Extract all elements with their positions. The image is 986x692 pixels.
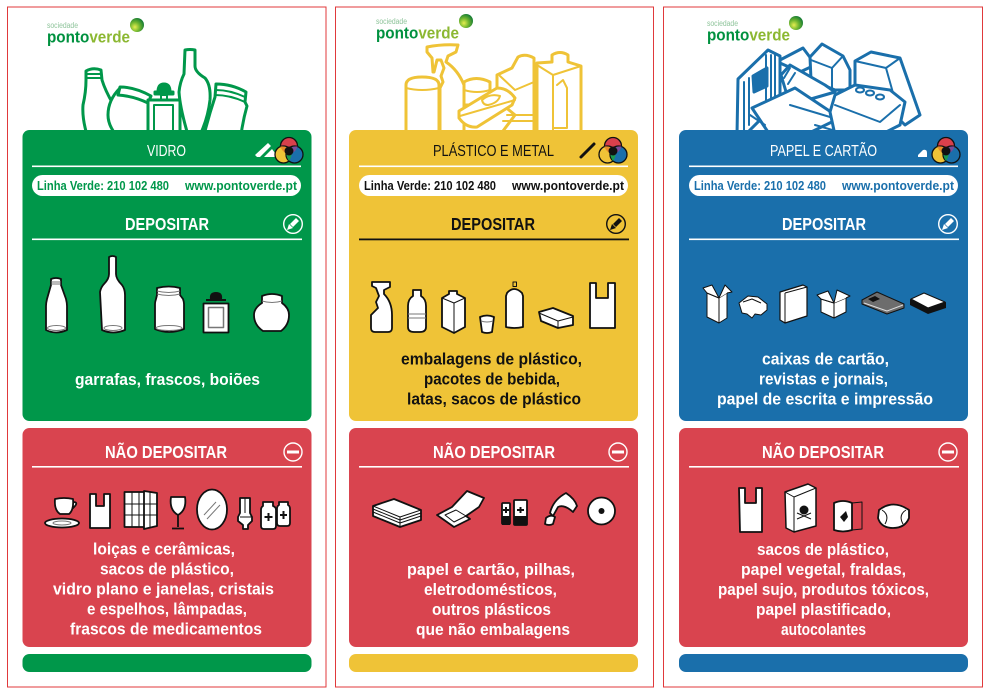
icon: window	[124, 491, 157, 529]
logo: ponto verde: pontoverde	[707, 26, 790, 44]
text: rejected list: vidro plano e janelas, cristais	[53, 580, 274, 598]
text: rejected list: eletrodomésticos,	[424, 581, 557, 599]
card: nao depositar plastico	[349, 428, 638, 647]
text: rejected list	[53, 540, 274, 638]
icon: toxic box	[785, 484, 816, 532]
icon: small cup	[480, 316, 494, 333]
heading: nao depositar: NÃO DEPOSITAR	[105, 441, 227, 462]
bottom colour bar	[679, 654, 968, 672]
icon: plastic bottle	[408, 290, 426, 332]
icons: accepted plastic and metal	[371, 282, 615, 333]
icons: accepted paper	[703, 285, 946, 323]
contact pill: Linha Verde: 210 102 480	[37, 178, 169, 193]
text: rejected list: frascos de medicamentos	[70, 620, 262, 638]
logo: ponto verde	[376, 14, 473, 42]
contact pill	[689, 175, 958, 196]
icon: wine bottle	[100, 256, 125, 332]
icon: jar	[155, 286, 184, 332]
panel: vidro	[8, 7, 326, 687]
text: accepted list: caixas de cartão,	[762, 350, 889, 368]
logo: ponto verde: pontoverde	[376, 24, 459, 42]
logo: ponto verde: sociedade	[47, 21, 78, 30]
icon: pizza box	[437, 491, 484, 527]
icon: paper stack	[373, 499, 421, 527]
contact pill: www.pontoverde.pt	[841, 178, 955, 193]
text: rejected list: sacos de plástico,	[100, 560, 234, 578]
logo: ponto verde: pontoverde	[47, 28, 130, 46]
icon: medicine bottles	[261, 502, 290, 529]
icon: bulb	[238, 498, 252, 529]
icon: minus circle	[609, 443, 627, 461]
heading: vidro: VIDRO	[147, 143, 186, 160]
panel frame	[664, 7, 982, 687]
icon: paper pile	[910, 293, 946, 314]
icon: mirror	[197, 490, 227, 530]
text: rejected list: outros plásticos	[432, 601, 551, 619]
icon: colour circles	[932, 138, 960, 163]
card: depositar plastico	[349, 130, 638, 421]
icon: minus circle	[939, 443, 957, 461]
text: accepted list: latas, sacos de plástico	[407, 390, 581, 408]
icon: milk bottle	[46, 278, 67, 332]
icon: perfume	[204, 292, 228, 332]
text: accepted list: papel de escrita e impressão	[717, 390, 933, 408]
text: accepted list	[717, 350, 933, 408]
text: rejected list: e espelhos, lâmpadas,	[87, 600, 247, 618]
text: accepted list: garrafas, frascos, boiões	[75, 371, 260, 389]
card: depositar vidro	[22, 130, 312, 421]
heading: depositar: DEPOSITAR	[125, 214, 209, 234]
heading: depositar: DEPOSITAR	[451, 214, 535, 234]
text: accepted list: pacotes de bebida,	[424, 370, 560, 388]
icon: open box	[817, 290, 850, 318]
icon: plastic symbol	[581, 144, 594, 157]
icon: paper bag	[780, 285, 807, 323]
contact pill: Linha Verde: 210 102 480	[694, 178, 826, 193]
icon: glass symbol	[255, 143, 278, 157]
text: rejected list: autocolantes	[781, 621, 866, 639]
bottom colour bar	[349, 654, 638, 672]
icons: accepted glass	[46, 256, 289, 332]
icon: egg carton	[739, 296, 767, 318]
icon: colour circles	[599, 138, 627, 163]
icon: plastic bag	[590, 283, 615, 328]
text: accepted list: revistas e jornais,	[759, 370, 888, 388]
text: rejected list: sacos de plástico,	[757, 541, 889, 559]
text: accepted list	[401, 350, 582, 408]
icons: rejected glass	[45, 490, 290, 530]
panel: papel e cartao	[664, 7, 982, 687]
icon: aerosol can	[506, 282, 523, 328]
text: rejected list: papel vegetal, fraldas,	[741, 561, 906, 579]
icon: cup and saucer	[45, 498, 79, 528]
icon: tall box	[703, 285, 732, 323]
heading: plastico e metal: PLÁSTICO E METAL	[433, 141, 554, 160]
card: nao depositar vidro	[22, 428, 312, 647]
icon: pen circle	[284, 215, 302, 233]
icon: plastic bag	[90, 494, 110, 528]
logo: ponto verde: sociedade	[376, 17, 407, 26]
icon: newspaper	[862, 292, 904, 314]
contact pill	[32, 175, 301, 196]
icon: colour circles	[275, 138, 303, 163]
illustration: paper and cardboard	[737, 44, 920, 135]
text: rejected list: loiças e cerâmicas,	[93, 540, 235, 558]
icon: hand mixer	[545, 493, 577, 525]
text: rejected list: que não embalagens	[416, 621, 570, 639]
icon: pen circle	[939, 215, 957, 233]
contact pill	[359, 175, 628, 196]
panel frame	[336, 7, 654, 687]
icon: tuna can	[539, 308, 573, 328]
icons: rejected items	[373, 491, 615, 527]
icon: spray bottle	[371, 282, 392, 332]
icon: minus circle	[284, 443, 302, 461]
contact pill: Linha Verde: 210 102 480	[364, 178, 496, 193]
icon: cd	[588, 498, 615, 524]
icon: paper symbol	[918, 150, 927, 157]
illustration: plastic and metal packaging	[406, 45, 581, 135]
heading: nao depositar: NÃO DEPOSITAR	[762, 441, 884, 462]
text: accepted list: embalagens de plástico,	[401, 350, 582, 368]
text: rejected list	[407, 561, 575, 639]
text: rejected list: papel plastificado,	[756, 601, 891, 619]
icon: plastic bag	[739, 488, 762, 532]
panel frame	[8, 7, 326, 687]
heading: nao depositar: NÃO DEPOSITAR	[433, 441, 555, 462]
text: rejected list: papel sujo, produtos tóxicos,	[718, 581, 929, 599]
card: nao depositar papel	[679, 428, 968, 647]
icons: rejected paper items	[739, 484, 909, 532]
icon: wine glass	[171, 497, 185, 528]
bottom colour bar	[22, 654, 312, 672]
heading: depositar: DEPOSITAR	[782, 214, 866, 234]
panel: plastico e metal	[336, 7, 654, 687]
illustration: glass containers	[83, 50, 247, 135]
icon: drink carton	[442, 291, 465, 333]
icon: diaper	[878, 504, 909, 528]
icon: pen circle	[607, 215, 625, 233]
text: rejected list	[718, 541, 929, 639]
text: rejected list: papel e cartão, pilhas,	[407, 561, 575, 579]
logo: ponto verde	[707, 16, 803, 44]
heading: papel e cartao: PAPEL E CARTÃO	[770, 140, 877, 160]
logo: ponto verde: sociedade	[707, 19, 738, 28]
card: depositar papel	[679, 130, 968, 421]
icon: round jar	[254, 294, 289, 331]
icon: kitchen roll	[834, 501, 862, 532]
icon: batteries	[502, 500, 527, 525]
contact pill: www.pontoverde.pt	[184, 178, 298, 193]
contact pill: www.pontoverde.pt	[511, 178, 625, 193]
logo: ponto verde	[47, 18, 144, 46]
